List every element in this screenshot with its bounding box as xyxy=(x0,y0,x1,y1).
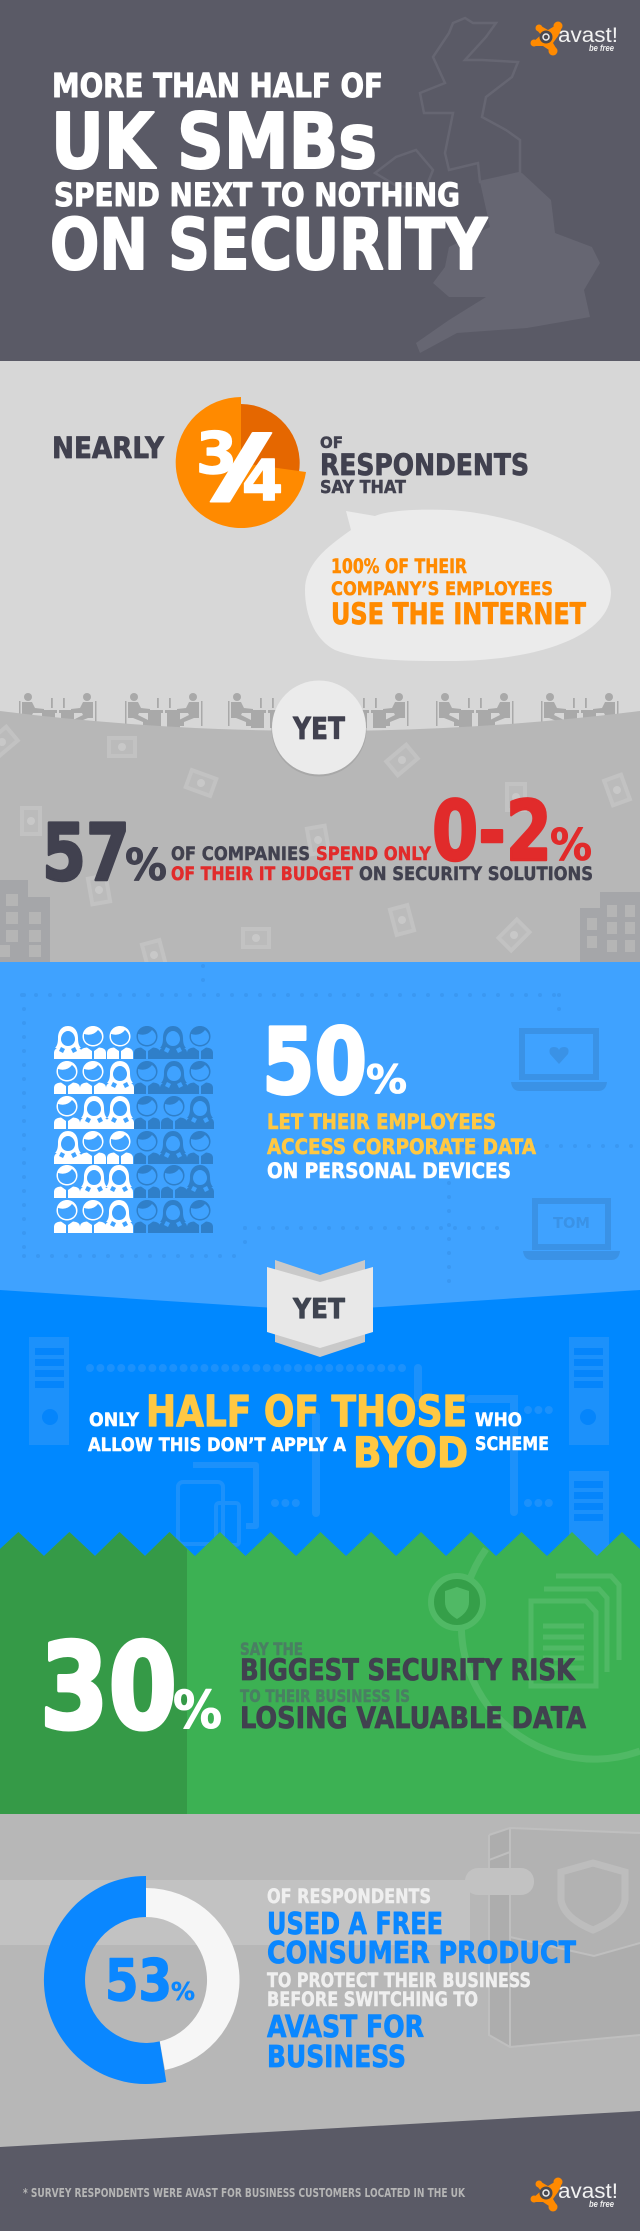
panel: 50 percent personal devices xyxy=(0,962,640,1322)
pie chart: three quarters xyxy=(176,397,306,528)
text: only half of those who allow this don't apply a BYOD scheme xyxy=(88,1387,549,1477)
panel: header xyxy=(0,0,640,361)
pie chart: three quarters: 3 xyxy=(196,421,237,487)
text: used a free consumer product: BEFORE SWITCHING TO xyxy=(267,1988,478,2011)
text: used a free consumer product xyxy=(267,1885,576,2075)
speech bubble xyxy=(305,510,611,661)
text: of companies spend only xyxy=(171,843,431,865)
text: let their employees access corporate data: LET THEIR EMPLOYEES xyxy=(267,1110,496,1134)
text: only half of those who allow this don't apply a BYOD scheme: HALF OF THOSE xyxy=(146,1387,467,1437)
text: only half of those who allow this don't apply a BYOD scheme: ONLY xyxy=(89,1409,139,1431)
text: of companies spend only: SPEND ONLY xyxy=(316,843,431,865)
text: biggest security risk is losing valuable data: BIGGEST SECURITY RISK xyxy=(240,1653,576,1687)
text: biggest security risk is losing valuable data: LOSING VALUABLE DATA xyxy=(240,1701,586,1735)
text: used a free consumer product: OF RESPONDENTS xyxy=(267,1885,431,1908)
statistic: 30 percent: 30 xyxy=(40,1619,177,1757)
statistic: 0-2 percent: % xyxy=(550,820,592,871)
text: used a free consumer product: USED A FREE xyxy=(267,1907,443,1942)
statistic: 30 percent: % xyxy=(173,1681,222,1741)
ribbon: yet: YET xyxy=(292,1292,345,1325)
text: let their employees access corporate data xyxy=(267,1110,537,1183)
pictogram: employees, half highlighted xyxy=(54,1026,214,1233)
text: only half of those who allow this don't apply a BYOD scheme: WHO xyxy=(475,1409,522,1431)
badge: yet circle xyxy=(272,680,366,776)
donut chart: 53 percent xyxy=(44,1876,240,2084)
pie chart: three quarters: / xyxy=(211,416,272,514)
donut chart: 53 percent: % xyxy=(171,1977,195,2006)
text: of their IT budget on security solutions: ON SECURITY SOLUTIONS xyxy=(359,863,593,885)
text: of respondents say that: SAY THAT xyxy=(320,477,407,498)
panel: 53 percent free consumer product xyxy=(0,1814,640,2154)
icon: laptop with name: TOM xyxy=(553,1214,590,1232)
panel: only half apply BYOD xyxy=(0,1260,640,1570)
title: MORE THAN HALF OF xyxy=(52,66,383,105)
statistic: 57 percent: 57 xyxy=(42,809,130,899)
text: used a free consumer product: CONSUMER PRODUCT xyxy=(267,1936,576,1971)
text: let their employees access corporate data: ON PERSONAL DEVICES xyxy=(267,1159,511,1183)
text: only half of those who allow this don't apply a BYOD scheme: ALLOW THIS DON’T APPLY A xyxy=(88,1434,346,1456)
icon: shield lock xyxy=(431,1576,483,1628)
text: let their employees access corporate data: ACCESS CORPORATE DATA xyxy=(267,1135,537,1159)
background: circuit dots xyxy=(22,966,640,1290)
donut chart: 53 percent: 53 xyxy=(105,1948,172,2014)
illustration: office workers at desks xyxy=(19,693,618,728)
text: of companies spend only: OF COMPANIES xyxy=(171,843,310,865)
text: of their IT budget on security solutions xyxy=(171,863,593,885)
background: ring xyxy=(461,1549,640,1759)
statistic: 57 percent: % xyxy=(125,840,167,891)
title xyxy=(50,66,488,286)
statistic: 50 percent: % xyxy=(366,1058,407,1103)
text: used a free consumer product: TO PROTECT THEIR BUSINESS xyxy=(267,1969,531,1992)
text: biggest security risk is losing valuable data: SAY THE xyxy=(240,1640,303,1660)
background: servers and devices xyxy=(29,1337,609,1561)
panel: 30 percent biggest security risk xyxy=(0,1532,640,1814)
pie chart: three quarters: 4 xyxy=(242,449,283,514)
text: only half of those who allow this don't apply a BYOD scheme: SCHEME xyxy=(475,1433,549,1455)
icon: laptop with name xyxy=(523,1201,620,1260)
speech bubble: USE THE INTERNET xyxy=(331,597,586,631)
statistic: 0-2 percent: 0-2 xyxy=(432,783,552,880)
illustration: building right xyxy=(580,892,640,962)
text: of their IT budget on security solutions: OF THEIR IT BUDGET xyxy=(171,863,353,885)
map: England and Wales xyxy=(416,173,600,353)
title: SPEND NEXT TO NOTHING xyxy=(54,176,460,214)
title: ON SECURITY xyxy=(50,204,488,286)
text: nearly: NEARLY xyxy=(52,431,165,465)
map: Scotland outline xyxy=(420,18,520,182)
panel: footer xyxy=(0,2111,640,2231)
title: UK SMBs xyxy=(51,98,377,187)
text: of respondents say that xyxy=(320,433,529,498)
icon: documents xyxy=(531,1576,619,1686)
badge: yet circle: YET xyxy=(292,712,345,747)
panel: 57 percent of companies xyxy=(0,680,640,972)
background: banknotes xyxy=(0,724,632,972)
panel: three quarters of respondents xyxy=(0,361,640,741)
text: used a free consumer product: BUSINESS xyxy=(267,2040,406,2075)
text: biggest security risk is losing valuable data xyxy=(240,1640,586,1735)
logo: avast xyxy=(530,22,618,56)
illustration: building left xyxy=(0,880,50,962)
speech bubble: 100% OF THEIR xyxy=(331,555,467,578)
text: only half of those who allow this don't apply a BYOD scheme: BYOD xyxy=(353,1428,468,1477)
text: of respondents say that: OF xyxy=(320,433,343,452)
background: safe illustration xyxy=(0,1828,640,2047)
icon: laptop with heart xyxy=(511,1031,607,1091)
text: biggest security risk is losing valuable data: TO THEIR BUSINESS IS xyxy=(240,1687,410,1707)
map: Northern Ireland outline xyxy=(375,150,433,190)
ribbon: yet xyxy=(267,1260,373,1357)
footnote: * SURVEY RESPONDENTS WERE AVAST FOR BUSINESS CUSTOMERS LOCATED IN THE UK xyxy=(23,2185,466,2200)
statistic: 50 percent: 50 xyxy=(262,1010,367,1115)
text: used a free consumer product: AVAST FOR xyxy=(267,2010,424,2045)
speech bubble: COMPANY’S EMPLOYEES xyxy=(331,578,553,600)
text: of respondents say that: RESPONDENTS xyxy=(320,448,529,482)
logo: avast footer xyxy=(530,2178,618,2212)
